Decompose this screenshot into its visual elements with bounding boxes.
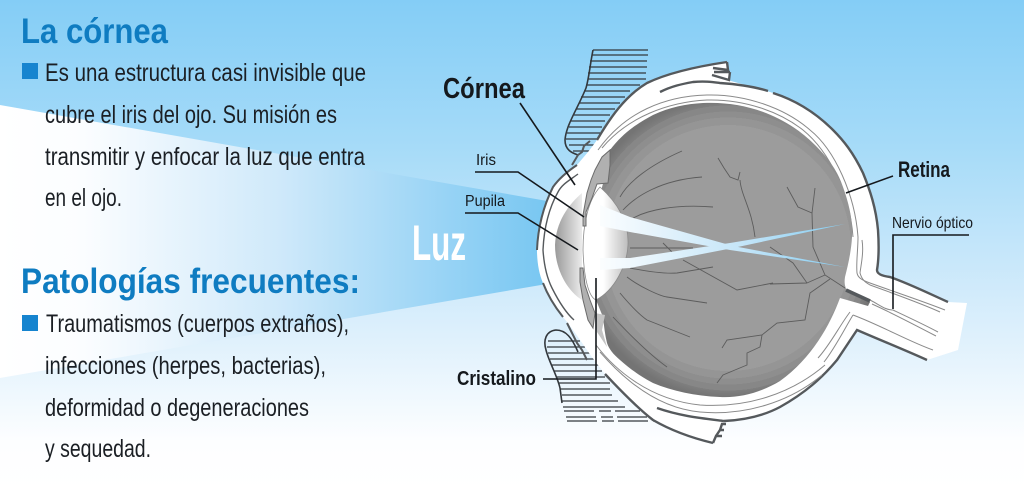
sclera outer coat [537, 61, 967, 443]
eye diagram [537, 50, 967, 443]
vitreous globe [596, 103, 870, 397]
label: Retina [846, 157, 951, 193]
label: Pupila: Pupila [465, 193, 505, 210]
label: Nervio óptico: Nervio óptico [892, 215, 973, 232]
iris lower [580, 268, 595, 328]
light ray lower [600, 224, 845, 270]
label: Cristalino: Cristalino [457, 368, 536, 390]
light rays crossing [600, 205, 845, 267]
text block: pathologies: y sequedad. [45, 435, 151, 463]
bullet square [22, 315, 38, 331]
iris upper [583, 150, 610, 226]
label: Pupila [465, 193, 578, 250]
label: Luz: Luz [412, 215, 466, 271]
lower eyelid hatching [545, 330, 655, 421]
title: La córnea: La córnea [21, 12, 168, 51]
label: Iris [475, 152, 584, 217]
sclera inner contour lines [596, 95, 945, 413]
label: Retina: Retina [898, 157, 951, 182]
heading: Patologías frecuentes: Patologías frecuentes: [21, 262, 360, 301]
anterior chamber [555, 193, 582, 300]
label: Córnea: Córnea [443, 73, 526, 105]
bullet square [22, 63, 38, 79]
text block: pathologies [22, 310, 349, 463]
text block: pathologies: deformidad o degeneraciones [45, 394, 309, 422]
optic nerve dark end [846, 290, 870, 301]
text block: definition: Es una estructura casi invisible que [45, 59, 366, 87]
eyelid edge upper [572, 141, 590, 165]
text block: pathologies: infecciones (herpes, bacterias), [45, 352, 326, 380]
crystalline lens [583, 187, 628, 300]
retinal blood vessels [613, 151, 845, 383]
text block: definition: en el ojo. [45, 184, 122, 212]
light beam wedge [0, 105, 570, 378]
label: Cristalino [457, 278, 596, 390]
label: Iris: Iris [476, 152, 496, 169]
sclera outlines [537, 62, 948, 443]
ciliary body lower [595, 313, 607, 347]
text block: definition [22, 59, 366, 212]
text block: pathologies: Traumatismos (cuerpos extraños), [46, 310, 349, 338]
text block: definition: transmitir y enfocar la luz que entra [45, 143, 365, 171]
upper eyelid hatching [565, 50, 648, 155]
label: Nervio óptico [892, 215, 973, 309]
text block: definition: cubre el iris del ojo. Su misión es [45, 101, 337, 129]
label: Córnea [443, 73, 575, 185]
eyelid edge lower [567, 323, 587, 360]
